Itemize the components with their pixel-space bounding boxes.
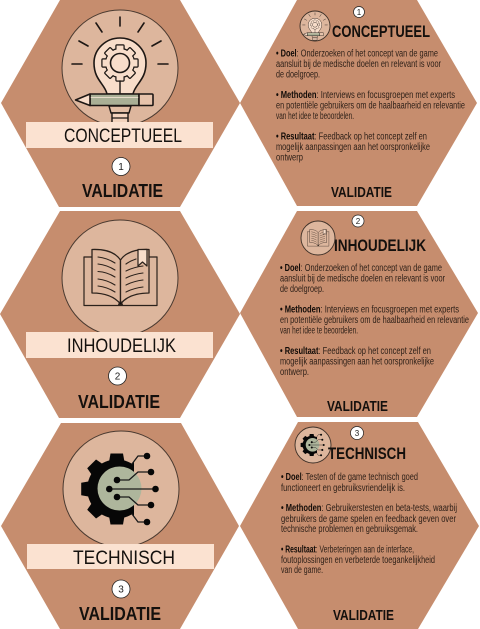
hexagon background	[0, 211, 240, 418]
text block: doel, methoden, resultaat: • Doel: Onderzoeken of het concept van de game	[276, 48, 438, 60]
banner: inhoudelijk	[26, 332, 213, 358]
text block: doel, methoden, resultaat: foutoplossingen en verbeterde toegankelijkheid	[281, 555, 435, 566]
text block: doel, methoden, resultaat: ontwerp	[276, 152, 303, 164]
text block: doel, methoden, resultaat: technische problemen en gebruiksgemak.	[281, 524, 418, 535]
heading: validatie: VALIDATIE	[331, 184, 392, 201]
banner: technisch	[27, 544, 214, 569]
text block: doel, methoden, resultaat: functioneert en gebruiksvriendelijk is.	[281, 483, 405, 494]
icon: light bulb with gear and pencil	[62, 10, 178, 126]
hexagon background	[1, 423, 239, 629]
number badge 1: 1	[357, 8, 362, 17]
hexagon background	[1, 0, 240, 207]
hexagon background	[240, 0, 477, 206]
text block: doel, methoden, resultaat: de doelgroep.	[280, 284, 324, 295]
text block: doel, methoden, resultaat: de doelgroep.	[276, 70, 320, 80]
text block: doel, methoden, resultaat: mogelijk aanpassingen aan het oorspronkelijke	[276, 142, 430, 153]
number badge 3: 3	[118, 584, 124, 596]
number badge 2	[108, 367, 126, 385]
icon: small book	[301, 221, 335, 255]
number badge 1	[354, 6, 364, 18]
number badge 2	[352, 215, 364, 227]
text block: doel, methoden, resultaat: van de game.	[281, 565, 323, 576]
panel: technisch card back	[240, 422, 479, 629]
heading: validatie: VALIDATIE	[82, 181, 163, 201]
heading: validatie: VALIDATIE	[79, 604, 161, 624]
text block: doel, methoden, resultaat	[280, 263, 469, 378]
number badge 1	[112, 158, 130, 176]
number badge 2: 2	[115, 372, 121, 382]
number badge 3	[350, 426, 364, 440]
panel: inhoudelijk card back	[240, 211, 478, 417]
hexagon background	[240, 211, 478, 417]
number badge 2: 2	[356, 217, 361, 226]
number badge 3: 3	[355, 429, 360, 438]
icon: gear with circuit nodes	[63, 431, 179, 547]
banner: technisch: TECHNISCH	[73, 548, 175, 569]
heading: validatie: VALIDATIE	[333, 607, 394, 624]
hexagon background	[240, 422, 479, 629]
panel: conceptueel card back	[240, 0, 477, 206]
text block: doel, methoden, resultaat: • Doel: Testen of de game technisch goed	[281, 472, 418, 483]
icon: open book	[62, 220, 178, 336]
panel: inhoudelijk card front	[0, 211, 240, 418]
text block: doel, methoden, resultaat: ontwerp.	[280, 367, 309, 378]
text block: doel, methoden, resultaat: • Resultaat: Verbeteringen aan de interface,	[281, 544, 414, 556]
text block: doel, methoden, resultaat: mogelijk aanpassingen aan het oorspronkelijke	[280, 356, 434, 368]
text block: doel, methoden, resultaat: van het idee te beoordelen.	[280, 326, 358, 336]
icon: small gear	[295, 427, 331, 463]
number badge 1: 1	[118, 162, 124, 173]
text block: doel, methoden, resultaat: van het idee te beoordelen.	[276, 111, 354, 122]
heading: conceptueel: CONCEPTUEEL	[332, 22, 430, 41]
text block: doel, methoden, resultaat	[276, 48, 465, 164]
panel: conceptueel card front	[1, 0, 240, 207]
text block: doel, methoden, resultaat	[281, 472, 457, 576]
number badge 3	[112, 580, 130, 598]
banner: inhoudelijk: INHOUDELIJK	[67, 336, 176, 357]
text block: doel, methoden, resultaat: • Resultaat: Feedback op het concept zelf en	[276, 132, 427, 142]
text block: doel, methoden, resultaat: • Resultaat: Feedback op het concept zelf en	[280, 346, 431, 357]
heading: technisch: TECHNISCH	[328, 444, 406, 463]
heading: inhoudelijk: INHOUDELIJK	[334, 236, 427, 255]
banner: conceptueel	[26, 122, 213, 148]
heading: validatie: VALIDATIE	[327, 398, 388, 415]
heading: validatie: VALIDATIE	[78, 392, 160, 412]
panel: technisch card front	[1, 423, 239, 629]
banner: conceptueel: CONCEPTUEEL	[64, 126, 182, 147]
icon: small bulb	[300, 11, 330, 41]
